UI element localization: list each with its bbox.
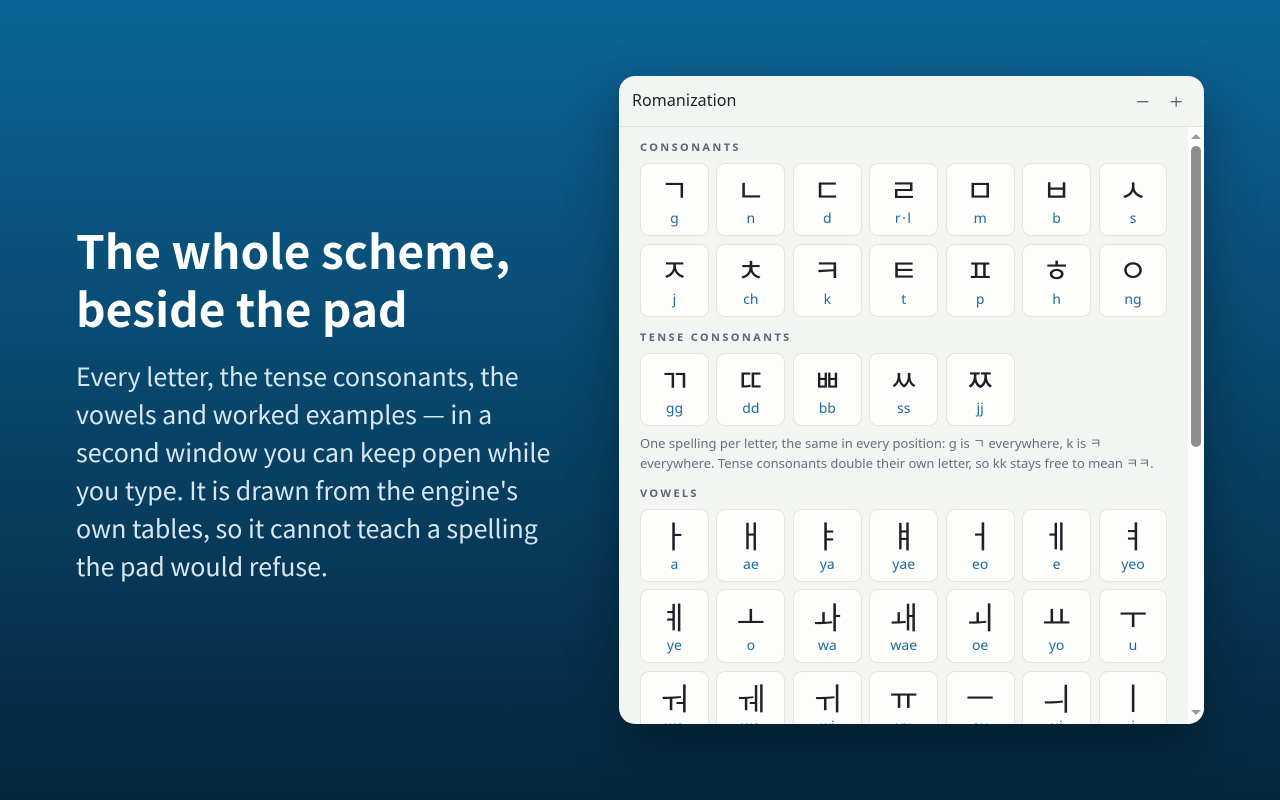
card: jj: jj	[977, 399, 984, 418]
card: ng: ㅇ	[1119, 246, 1147, 291]
window title: Romanization	[632, 89, 737, 111]
description text: the pad would refuse.	[76, 548, 328, 584]
card: ch: ㅊ	[737, 246, 765, 291]
description text: vowels and worked examples — in a	[76, 396, 492, 432]
card: jj: ㅉ	[966, 356, 994, 401]
description text: Every letter, the tense consonants, the	[76, 358, 519, 394]
card: wa	[793, 589, 862, 663]
card: o: o	[747, 636, 755, 655]
card: ae: ae	[743, 555, 759, 574]
card: yeo: yeo	[1121, 555, 1145, 574]
card: p	[946, 244, 1015, 317]
card: yo	[1022, 589, 1091, 663]
card: i	[1099, 671, 1167, 744]
card: yeo: ㅕ	[1119, 512, 1147, 557]
card: gg	[640, 353, 709, 426]
card: p: p	[976, 290, 984, 309]
card: yu: ㅠ	[889, 674, 918, 719]
card: oe: oe	[972, 636, 988, 655]
card: a: a	[671, 555, 678, 574]
card: d	[793, 163, 862, 236]
card: h: h	[1052, 290, 1061, 309]
description text: own tables, so it cannot teach a spelling	[76, 510, 538, 546]
card: e: e	[1053, 555, 1061, 574]
card: ch	[716, 244, 785, 317]
card: ch: ch	[743, 290, 759, 309]
card: we	[716, 671, 785, 744]
card: b: ㅂ	[1042, 166, 1071, 211]
card: yae: ㅒ	[889, 512, 918, 557]
card: wi: ㅟ	[813, 674, 842, 719]
card: r·l	[869, 163, 938, 236]
card: k	[793, 244, 862, 317]
card: wa: wa	[818, 636, 837, 655]
card: j: ㅈ	[660, 246, 689, 291]
card: ae	[716, 509, 785, 582]
heading: vowels: VOWELS	[640, 486, 699, 501]
card: d: ㄷ	[813, 166, 842, 211]
note text: everywhere. Tense consonants double their own letter, so kk stays free to mean ㅋㅋ.	[640, 454, 1154, 472]
card: oe: ㅚ	[966, 593, 994, 638]
card: o	[716, 589, 785, 663]
card: ui: ㅢ	[1042, 674, 1071, 719]
card: r·l: r·l	[895, 209, 913, 228]
card: m	[946, 163, 1015, 236]
card: g	[640, 163, 709, 236]
card: ye: ye	[667, 636, 682, 655]
card: gg: ㄲ	[660, 356, 689, 401]
card: b	[1022, 163, 1091, 236]
card: yo: yo	[1049, 636, 1064, 655]
card: bb	[793, 353, 862, 426]
description text: second window you can keep open while	[76, 434, 550, 470]
icon: scroll up arrow	[1191, 134, 1201, 139]
card: t: ㅌ	[889, 246, 918, 291]
card: m: ㅁ	[966, 166, 994, 211]
card: n	[716, 163, 785, 236]
card: g: ㄱ	[660, 166, 689, 211]
card: h: ㅎ	[1042, 246, 1071, 291]
card: eo: ㅓ	[966, 512, 994, 557]
card: ng: ng	[1124, 290, 1142, 309]
card: ya: ya	[820, 555, 835, 574]
card: gg: gg	[666, 399, 683, 418]
card: wae: ㅙ	[889, 593, 918, 638]
card: ss: ss	[897, 399, 910, 418]
title	[76, 217, 510, 341]
card: jj	[946, 353, 1015, 426]
card: oe	[946, 589, 1015, 663]
title: beside the pad	[76, 275, 408, 341]
panel: romanization window	[619, 76, 1204, 724]
card: u: u	[1129, 636, 1137, 655]
card: ye: ㅖ	[660, 593, 689, 638]
heading: consonants: CONSONANTS	[640, 140, 741, 154]
card: s: ㅅ	[1119, 166, 1147, 211]
scrollbar	[1188, 127, 1204, 724]
card: n: ㄴ	[737, 166, 765, 211]
card: ya	[793, 509, 862, 582]
title: The whole scheme,	[76, 217, 510, 283]
card: t	[869, 244, 938, 317]
card: yae	[869, 509, 938, 582]
card: k: k	[824, 290, 831, 309]
card: ae: ㅐ	[737, 512, 765, 557]
description text: you type. It is drawn from the engine's	[76, 472, 518, 508]
card: yu	[869, 671, 938, 744]
card: bb: ㅃ	[813, 356, 842, 401]
heading: tense consonants: TENSE CONSONANTS	[640, 330, 792, 345]
scrollbar thumb	[1191, 146, 1201, 447]
card: bb: bb	[819, 399, 836, 418]
card: b: b	[1052, 209, 1061, 228]
card: wae: wae	[890, 636, 917, 655]
card: g: g	[670, 209, 679, 228]
card: j	[640, 244, 709, 317]
card: m: m	[974, 209, 987, 228]
card: yo: ㅛ	[1042, 593, 1071, 638]
card: e: ㅔ	[1042, 512, 1071, 557]
card: wo: ㅝ	[660, 674, 689, 719]
card: we: ㅞ	[737, 674, 765, 719]
card: u	[1099, 589, 1167, 663]
card: n: n	[747, 209, 755, 228]
card: wae	[869, 589, 938, 663]
card: ss	[869, 353, 938, 426]
card: o: ㅗ	[737, 593, 765, 638]
card: eu	[946, 671, 1015, 744]
card: k: ㅋ	[813, 246, 842, 291]
card: wo	[640, 671, 709, 744]
card: e	[1022, 509, 1091, 582]
card: d: d	[823, 209, 832, 228]
card: t: t	[901, 290, 906, 309]
card: i: ㅣ	[1119, 674, 1147, 719]
card: a: ㅏ	[660, 512, 689, 557]
card: ui	[1022, 671, 1091, 744]
window title bar	[619, 76, 1204, 127]
card: j: j	[673, 290, 676, 309]
card: p: ㅍ	[966, 246, 994, 291]
card: eo: eo	[972, 555, 988, 574]
note text: One spelling per letter, the same in every position: g is ㄱ everywhere, k is ㅋ	[640, 434, 1102, 452]
card: h	[1022, 244, 1091, 317]
card: dd: dd	[742, 399, 759, 418]
description text	[76, 358, 550, 584]
card: ss: ㅆ	[889, 356, 918, 401]
note text	[640, 434, 1154, 472]
card: wi	[793, 671, 862, 744]
card: ya: ㅑ	[813, 512, 842, 557]
card: ng	[1099, 244, 1167, 317]
card: wa: ㅘ	[813, 593, 842, 638]
card: yae: yae	[892, 555, 915, 574]
card: eo	[946, 509, 1015, 582]
card: dd	[716, 353, 785, 426]
card: s	[1099, 163, 1167, 236]
card: r·l: ㄹ	[889, 166, 918, 211]
card: a	[640, 509, 709, 582]
card: yeo	[1099, 509, 1167, 582]
card: ye	[640, 589, 709, 663]
card: s: s	[1130, 209, 1136, 228]
card: u: ㅜ	[1119, 593, 1147, 638]
card: dd: ㄸ	[737, 356, 765, 401]
icon: scroll down arrow	[1191, 710, 1201, 715]
icon: zoom controls	[1137, 96, 1182, 107]
card: eu: ㅡ	[966, 674, 994, 719]
